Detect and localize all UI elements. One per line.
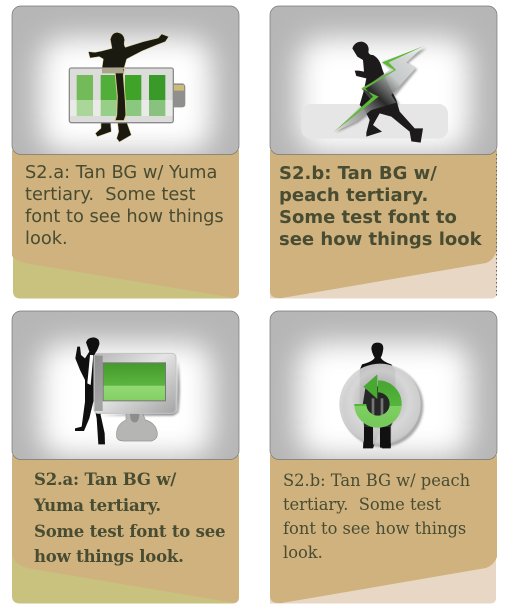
image panel [270,311,497,460]
peach tertiary corner [270,545,496,604]
card: S2.b sans bold, runner [270,6,497,298]
body text: S2.b: Tan BG w/ [279,163,437,184]
yuma tertiary corner [13,250,239,298]
card: S2.a serif bold, monitor [12,311,239,604]
body text: tertiary. Some test [283,495,441,514]
yuma tertiary corner [12,550,239,604]
tan panel [270,150,497,298]
body text: Some test font to see [34,522,225,541]
peach tertiary corner [270,240,497,298]
card: S2.a sans regular, battery [12,6,239,298]
body text: tertiary. Some test [25,184,196,205]
body text: font to see how things [25,206,224,227]
body text: see how things look [279,229,483,250]
card: S2.b serif regular, refresh [270,311,497,604]
body text: S2.a: Tan BG w/ Yuma [25,162,217,183]
body text: how things look. [34,547,184,566]
body text: S2.b: Tan BG w/ peach [283,471,471,490]
image panel [12,6,239,155]
tan panel [12,455,239,603]
image panel [270,6,497,155]
body text: look. [283,543,323,562]
body text: Yuma tertiary. [33,496,161,515]
body text: look. [25,228,68,249]
tan panel [12,150,239,298]
icon: person with refresh orb [339,343,423,448]
body text: Some test font to [279,207,457,228]
body text: font to see how things [283,519,466,538]
body text: peach tertiary. [279,185,428,206]
icon: runner with lightning bolt [301,42,448,143]
tan panel [270,455,497,603]
icon: person with battery [69,32,185,142]
icon: man beside monitor [75,337,180,444]
image panel [12,311,239,460]
dotted right edge [496,154,498,298]
body text: S2.a: Tan BG w/ [34,470,177,489]
